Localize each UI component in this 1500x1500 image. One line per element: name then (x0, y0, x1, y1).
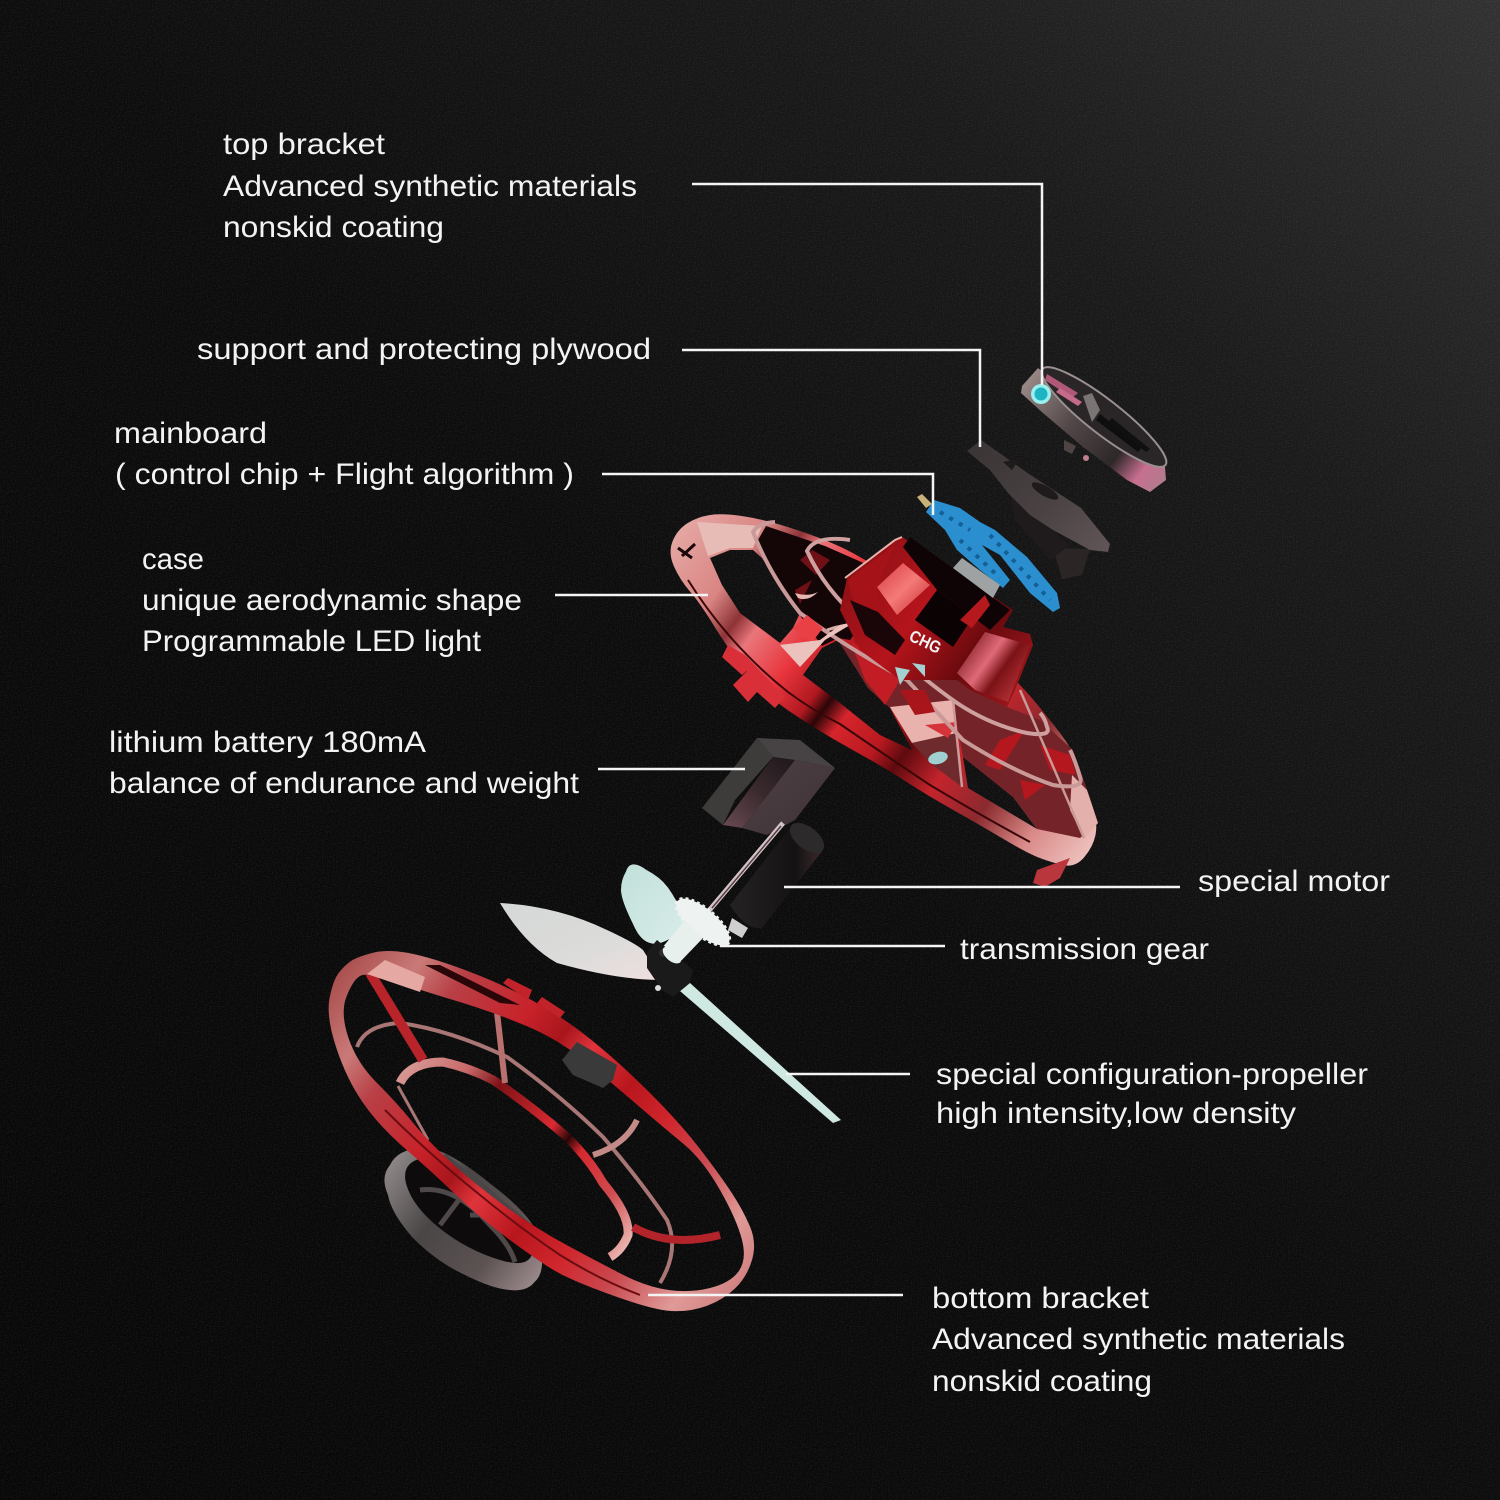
ring D (400, 1062, 628, 1257)
label: transmission gear: transmission gear (960, 933, 1209, 966)
label: case (142, 543, 522, 658)
label: lithium battery: balance of endurance and weight (109, 767, 580, 800)
label: case: unique aerodynamic shape (142, 584, 522, 617)
label: mainboard: mainboard (114, 417, 267, 450)
part: battery (702, 738, 835, 835)
label: propeller (936, 1058, 1368, 1130)
label: mainboard: ( control chip + Flight algorithm ) (115, 458, 574, 491)
buzzer (562, 1042, 617, 1088)
dark back panel (758, 526, 872, 646)
cyan LED dot (1031, 384, 1051, 404)
label: propeller: special configuration-propeller (936, 1058, 1368, 1091)
part: mainboard (917, 494, 1060, 612)
label: support plywood: support and protecting plywood (197, 333, 651, 366)
label: bottom bracket (932, 1282, 1345, 1398)
upper left pink panel (697, 522, 762, 556)
part: support plywood (967, 440, 1110, 579)
ring C (357, 1023, 672, 1283)
label: lithium battery: lithium battery 180mA (109, 726, 426, 759)
upper left notch (678, 544, 695, 558)
groove on band (688, 580, 1030, 842)
label: bottom bracket: bottom bracket (932, 1282, 1150, 1315)
inner ring lines (753, 522, 1081, 786)
label: bottom bracket: nonskid coating (932, 1365, 1152, 1398)
label: top bracket: top bracket (223, 128, 386, 161)
ring body (329, 951, 754, 1311)
part: case ring (671, 514, 1098, 866)
part: case hub (840, 537, 1033, 715)
part: bottom bracket disc (384, 1148, 542, 1290)
label: case: Programmable LED light (142, 625, 482, 658)
exploded product diagram (329, 356, 1176, 1311)
part: motor (707, 817, 830, 938)
label: top bracket: nonskid coating (223, 211, 444, 244)
part: top bracket (1021, 356, 1176, 492)
center wedge (890, 700, 957, 743)
part: case tabs (722, 615, 1070, 887)
label: special motor: special motor (1198, 865, 1390, 898)
label: case: case (142, 543, 204, 576)
label: lithium battery (109, 726, 580, 800)
leader lines (555, 184, 1180, 1295)
hub logo: CHG (906, 626, 944, 658)
label: bottom bracket: Advanced synthetic materials (932, 1323, 1345, 1356)
label: propeller: high intensity,low density (936, 1097, 1296, 1130)
part: propeller blades (500, 864, 841, 1123)
rose panel right (838, 640, 1098, 838)
label: mainboard (114, 417, 574, 491)
label: top bracket: Advanced synthetic materials (223, 170, 637, 203)
tabs (503, 978, 565, 1018)
spokes (370, 973, 423, 1060)
label: top bracket (223, 128, 637, 244)
part: bottom bracket ring (329, 951, 754, 1311)
part: transmission gear and hub (647, 891, 737, 997)
